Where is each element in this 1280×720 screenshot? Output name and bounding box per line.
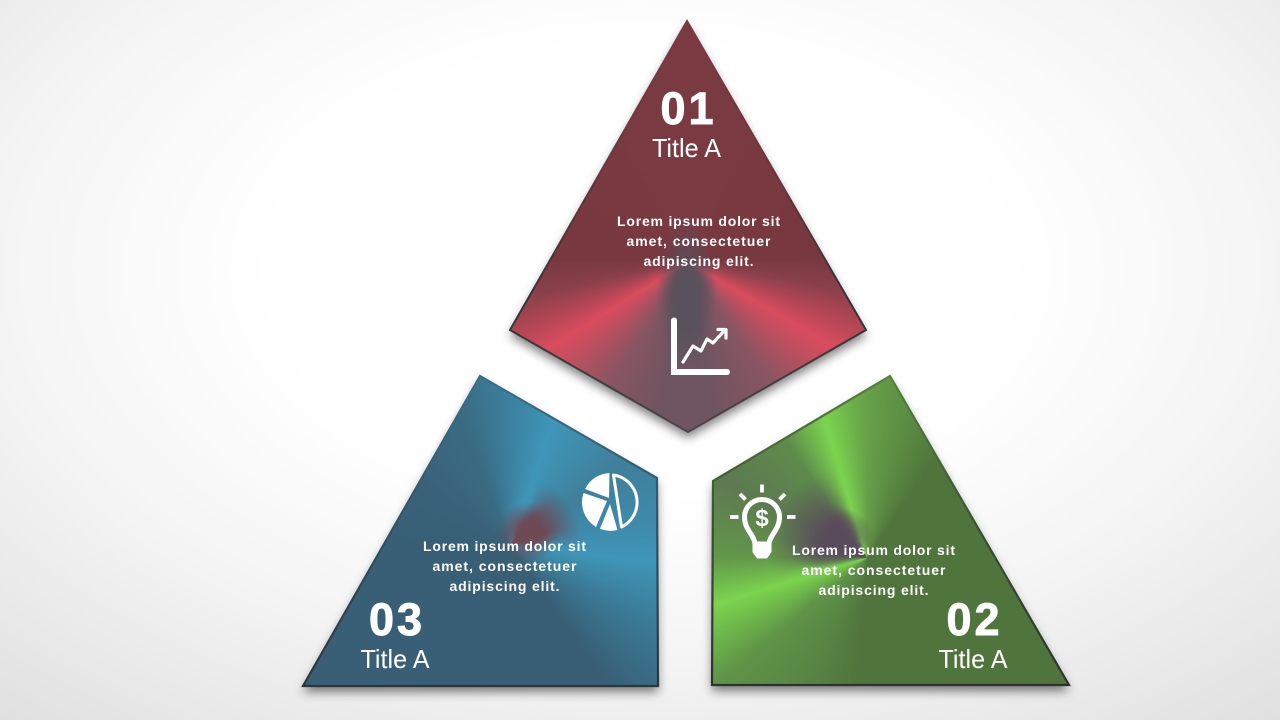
title: Title A: [360, 644, 430, 674]
icon: line chart: [674, 320, 727, 372]
number 01: 01: [660, 83, 714, 134]
body text: Lorem ipsum dolor sit: [617, 213, 780, 229]
body text: adipiscing elit.: [450, 578, 560, 594]
number 02: 02: [946, 594, 1000, 645]
body text: amet, consectetuer: [432, 558, 577, 574]
icon: light bulb with dollar sign: $: [755, 505, 769, 532]
icon: light bulb with dollar sign: [730, 484, 796, 558]
number 03: 03: [369, 594, 422, 645]
title: Title A: [652, 133, 722, 163]
body text: amet, consectetuer: [626, 233, 771, 249]
body text: Lorem ipsum dolor sit: [792, 542, 955, 558]
body text: [617, 213, 780, 269]
panel 02: green segment: [704, 374, 1073, 698]
body text: amet, consectetuer: [802, 562, 946, 578]
title: Title A: [938, 644, 1008, 674]
icon: pie chart: [582, 473, 637, 531]
body text: adipiscing elit.: [818, 582, 928, 598]
body text: [423, 538, 586, 594]
panel 01: red pyramid segment: [506, 19, 870, 444]
panel 03: blue segment: [299, 374, 666, 700]
body text: adipiscing elit.: [644, 253, 754, 269]
body text: [792, 542, 955, 598]
body text: Lorem ipsum dolor sit: [423, 538, 586, 554]
